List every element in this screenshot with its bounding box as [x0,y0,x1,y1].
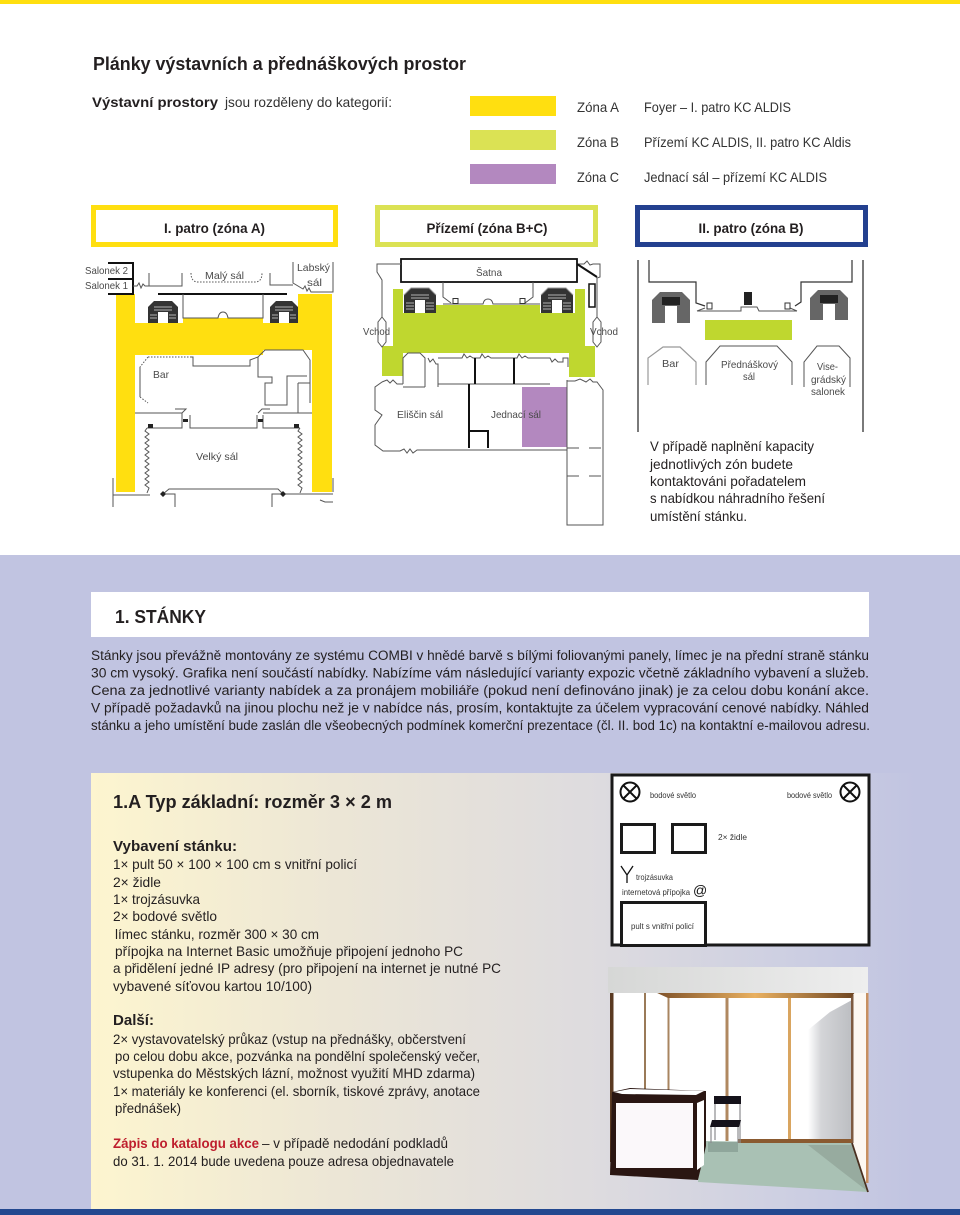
icon: chairs [622,824,706,852]
panel heading: 1.A: 1.A Typ základní: rozměr 3 × 2 m [113,792,392,812]
stánky description [91,648,870,733]
top yellow bar [0,0,960,4]
bottom blue bar [0,1209,960,1215]
chair [708,1096,741,1152]
intro text [92,94,392,110]
frame posts [610,992,868,1192]
section heading: 1. Stánky: 1. STÁNKY [115,606,206,627]
diagram labels: bodové světlo [650,791,697,800]
room labels: grádský [811,374,847,386]
room labels [85,262,331,463]
further services: vstupenka do Městských lázní, možnost využití MHD zdarma) [113,1066,475,1081]
icon: staircase left [652,292,690,323]
diagram labels [622,791,832,931]
diagram labels: 2× židle [718,833,748,842]
room labels: Velký sál [196,451,238,463]
room labels: sál [307,277,322,289]
equipment list [113,839,501,994]
diagram labels: trojzásuvka [636,873,673,882]
capacity note: kontaktováni pořadatelem [650,474,806,489]
floor heading: Přízemí: Přízemí (zóna B+C) [426,221,548,236]
equipment list: 1× pult 50 × 100 × 100 cm s vnitřní policí [113,857,357,872]
zone B area [382,289,595,377]
lavender background panel [0,555,960,1215]
walls [638,260,863,432]
floor heading: I. patro [94,208,336,244]
legend zone C [470,164,827,185]
further services: Další: [113,1013,154,1029]
walls [108,262,333,507]
room labels: Salonek 2 [85,265,128,277]
icon: counter [622,902,706,946]
room labels: Vchod [363,326,390,338]
stánky description: stánku a jeho umístění bude zaslán dle všeobecných podmínek komerční prezentace (čl. II. bod 1c) na kontaktní e-mailovou adresu. [91,718,870,733]
legend: zones [470,96,851,185]
counter [610,1088,706,1180]
icon: spot light right [840,782,860,802]
title: Plánky výstavních a přednáškových prostor [93,54,466,74]
diagram labels: bodové světlo [787,791,832,800]
room labels: Vchod [590,326,618,338]
catalogue note: – v případě nedodání podkladů [262,1136,448,1151]
wall shadow [808,1000,852,1142]
capacity note: umístění stánku. [650,509,747,524]
catalogue note [113,1136,454,1169]
fascia [608,967,868,993]
room labels: Přednáškový [721,359,779,371]
floor plan: Přízemí [363,259,618,525]
further services: 1× materiály ke konferenci (el. sborník, tiskové zprávy, anotace [113,1084,480,1099]
section heading: 1. Stánky [91,592,869,637]
floor [698,1141,868,1192]
equipment list: 2× židle [113,875,161,890]
floor heading: II. patro: II. patro (zóna B) [698,221,804,236]
equipment list: 1× trojzásuvka [113,892,200,907]
stánky description: Stánky jsou převážně montovány ze systému COMBI v hnědé barvě s bílými foliovanými panely, límec je na přední straně stánku [91,648,869,663]
diagram labels: @ [693,882,707,898]
equipment list: límec stánku, rozměr 300 × 30 cm [115,927,319,942]
icon: staircase right [270,301,298,323]
legend zone A [470,96,791,116]
legend zone B [470,130,851,150]
walls [375,259,603,525]
icon: socket [621,866,633,883]
icon: staircase left [148,301,178,323]
equipment list: Vybavení stánku: [113,839,237,855]
room labels: Vise- [817,361,838,373]
booth layout diagram [612,775,869,946]
floor plan: I. patro [85,262,333,507]
capacity note: s nabídkou náhradního řešení [650,491,825,506]
further services [113,1013,480,1116]
stánky description: Cena za jednotlivé varianty nabídek a za pronájem mobiliáře (pokud není definováno jinak) je za celou dobu konání akce. [91,683,869,698]
room labels: salonek [811,386,846,398]
room labels: sál [743,371,755,383]
stánky description: 30 cm vysoký. Grafika není součástí nabídky. Nabízíme vám následující varianty expozic včetně základního vybavení a služeb. [91,666,869,680]
icon: spot light left [620,782,640,802]
room labels [662,358,847,398]
further services: 2× vystavovatelský průkaz (vstup na přednášky, občerstvení [113,1032,466,1047]
equipment list: a přidělení jedné IP adresy (pro připojení na internet je nutné PC [113,961,501,976]
floor plan: II. patro [638,260,863,432]
further services: přednášek) [115,1101,181,1116]
legend zone B: Přízemí KC ALDIS, II. patro KC Aldis [644,135,851,150]
room labels: Šatna [476,266,502,279]
equipment list: přípojka na Internet Basic umožňuje připojení jednoho PC [115,944,463,959]
catalogue note: Zápis do katalogu akce [113,1136,259,1151]
further services: po celou dobu akce, pozvánka na pondělní společenský večer, [115,1049,480,1064]
floor heading: II. patro [638,208,866,244]
floor heading: Přízemí [378,208,596,244]
room labels: Bar [662,358,680,370]
capacity note [649,439,825,524]
legend zone A: Foyer – I. patro KC ALDIS [644,100,791,115]
zone B area [705,320,792,340]
room labels: Labský [297,262,331,274]
icon: staircase left [404,288,436,313]
icon: staircase right [810,290,848,320]
diagram labels: internetová přípojka [622,888,691,897]
booth illustration [608,967,868,1192]
equipment list: vybavené síťovou kartou 10/100) [113,979,312,994]
room labels [363,266,618,421]
room labels: Eliščin sál [397,409,443,421]
stánky description: V případě požadavků na jinou plochu než je v nabídce nás, prosím, kontaktujte za účelem vypracování cenové nabídky. Náhled [91,700,869,716]
room labels: Salonek 1 [85,280,128,292]
capacity note: jednotlivých zón budete [649,457,793,472]
legend zone A: Zóna A [577,100,620,115]
zone C area [522,387,567,447]
capacity note: V případě naplnění kapacity [650,439,814,454]
diagram labels: pult s vnitřní policí [631,922,695,931]
zone A area [116,294,332,492]
walls [610,993,868,1143]
room labels: Jednací sál [491,409,541,421]
icon: staircase right [541,288,573,313]
equipment list: 2× bodové světlo [113,909,217,924]
room labels: Malý sál [205,270,244,282]
room labels: Bar [153,369,169,381]
panel: 1.A gradient background [91,773,915,1209]
catalogue note: do 31. 1. 2014 bude uvedena pouze adresa objednavatele [113,1154,454,1169]
legend zone C: Zóna C [577,170,619,185]
legend zone C: Jednací sál – přízemí KC ALDIS [644,170,827,185]
legend zone B: Zóna B [577,135,619,150]
intro text: Výstavní prostory [92,94,218,110]
intro text: jsou rozděleny do kategorií: [224,95,392,110]
floor heading: I. patro: I. patro (zóna A) [164,221,265,236]
